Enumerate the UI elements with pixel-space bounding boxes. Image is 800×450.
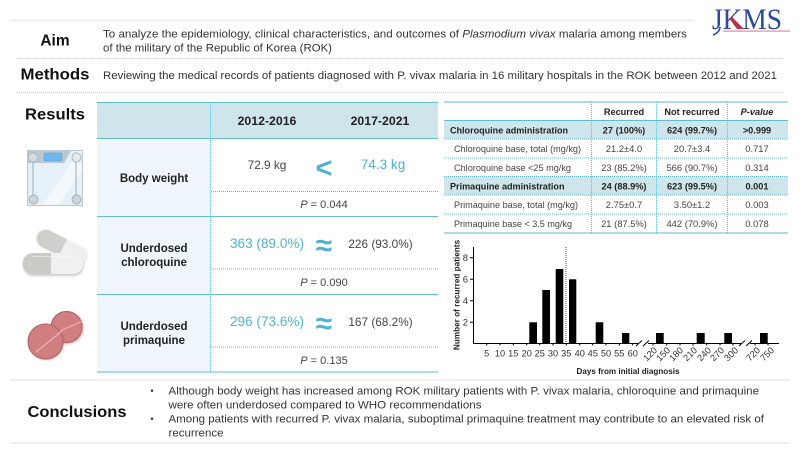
text: conclusions bullets: recurrence — [168, 428, 224, 440]
row: chloroquine base under 25: 0.314 — [745, 162, 769, 173]
row: primaquine base under 3.5: Primaquine base < 3.5 mg/kg — [454, 218, 572, 229]
x tick labels: 720 — [744, 345, 762, 363]
text: aim description: To analyze the epidemiology, clinical characteristics, and outcomes of Plasmodium vivax malaria among members — [103, 28, 680, 40]
x tick labels: 240 — [695, 345, 713, 363]
x tick labels: 5 — [484, 348, 489, 358]
row: chloroquine base total: 20.7±3.4 — [674, 143, 710, 154]
table header row: P-value — [741, 107, 773, 117]
row: underdosed chloroquine: Underdosed — [120, 243, 188, 255]
table header: 2017-2021 — [351, 114, 410, 128]
row: primaquine administration — [450, 182, 768, 192]
x tick labels: 40 — [575, 348, 585, 358]
icon: capsules — [22, 227, 90, 276]
x tick labels: 50 — [601, 348, 611, 358]
row: chloroquine base under 25: 23 (85.2%) — [601, 162, 647, 173]
icon: primaquine tablets — [28, 312, 84, 360]
y tick labels: 6 — [463, 274, 468, 286]
axes — [470, 247, 779, 346]
table header: 2012-2016 — [238, 114, 297, 128]
x tick labels: 55 — [614, 348, 624, 358]
text: conclusions bullets: Although body weight has increased among ROK military patients with P. vivax malaria, chloroquine and primaquine — [168, 386, 759, 398]
row: chloroquine administration: Chloroquine administration — [450, 126, 568, 136]
text: aim description: of the military of the Republic of Korea (ROK) — [103, 42, 332, 54]
row: underdosed primaquine — [120, 308, 413, 367]
table header row — [604, 107, 773, 117]
row: underdosed primaquine: ≈ — [316, 308, 332, 340]
x tick labels: 15 — [508, 348, 518, 358]
x tick labels: 210 — [681, 345, 699, 363]
row: underdosed primaquine: Underdosed — [120, 321, 188, 333]
row: body weight: Body weight — [120, 173, 188, 185]
x tick labels: 270 — [708, 345, 726, 363]
row: primaquine base under 3.5: 0.078 — [745, 218, 769, 229]
icon: bathroom scale — [28, 150, 82, 206]
panel: dosing comparison table — [97, 102, 438, 372]
y tick labels: 8 — [463, 253, 468, 264]
row: body weight: < — [316, 152, 332, 184]
row: primaquine base total: 3.50±1.2 — [674, 199, 710, 210]
heading: Methods: Methods — [20, 66, 90, 83]
panel: recurrence table — [444, 102, 788, 233]
row: primaquine administration: Primaquine administration — [450, 182, 565, 192]
x tick labels: 30 — [548, 348, 558, 358]
row: body weight: P = 0.044 — [300, 199, 348, 211]
row: underdosed chloroquine: 226 (93.0%) — [348, 237, 413, 251]
logo: JKMS: JKMS — [712, 3, 782, 36]
row: chloroquine base under 25: Chloroquine base <25 mg/kg — [454, 162, 571, 173]
y tick labels: 2 — [463, 318, 468, 328]
row: chloroquine base total: Chloroquine base, total (mg/kg) — [454, 143, 581, 154]
row: primaquine base total: Primaquine base, total (mg/kg) — [454, 199, 578, 210]
table header — [97, 102, 438, 138]
x tick labels: 10 — [495, 348, 505, 358]
bars — [529, 269, 768, 343]
row: primaquine base under 3.5: 442 (70.9%) — [666, 218, 718, 229]
row: chloroquine base total: 21.2±4.0 — [606, 143, 642, 154]
y tick labels: 4 — [463, 296, 468, 307]
row: chloroquine administration — [450, 126, 771, 136]
x tick labels: 35 — [561, 348, 571, 358]
x tick labels: 20 — [522, 348, 532, 358]
row: body weight — [120, 152, 405, 211]
row: primaquine administration: 0.001 — [746, 182, 768, 192]
table header row: Not recurred — [664, 107, 720, 117]
x tick labels: 45 — [588, 348, 598, 358]
reference line at day 35 — [565, 247, 567, 343]
row: underdosed primaquine: 167 (68.2%) — [348, 315, 413, 329]
row: underdosed primaquine: 296 (73.6%) — [230, 314, 304, 329]
row: primaquine base under 3.5 — [454, 218, 769, 229]
heading: Results: Results — [25, 106, 85, 123]
row: chloroquine base under 25: 566 (90.7%) — [666, 162, 718, 173]
row: underdosed chloroquine: ≈ — [316, 230, 332, 262]
text: conclusions bullets — [151, 386, 765, 440]
x axis title: Days from initial diagnosis — [576, 367, 680, 376]
row: primaquine administration: 24 (88.9%) — [602, 182, 646, 192]
row: chloroquine base under 25 — [454, 162, 769, 173]
heading: Conclusions: Conclusions — [28, 404, 126, 421]
row: primaquine administration: 623 (99.5%) — [667, 182, 717, 192]
row: chloroquine administration: 624 (99.7%) — [667, 126, 717, 136]
row: chloroquine base total — [454, 143, 769, 154]
x tick labels: 180 — [667, 345, 685, 363]
y tick labels — [463, 253, 468, 328]
row: underdosed chloroquine: 363 (89.0%) — [230, 236, 304, 251]
heading: Aim: Aim — [40, 32, 70, 50]
row: underdosed primaquine: P = 0.135 — [300, 355, 348, 367]
x tick labels: 25 — [535, 348, 545, 358]
x tick labels: 300 — [722, 345, 740, 363]
table header row: Recurred — [604, 107, 644, 117]
row: primaquine base under 3.5: 21 (87.5%) — [601, 218, 647, 229]
bar chart: days to recurrence — [452, 240, 779, 376]
x tick labels: 750 — [758, 345, 776, 363]
x tick labels: 120 — [641, 345, 659, 363]
row: primaquine base total: 0.003 — [745, 199, 769, 210]
row: primaquine base total: 2.75±0.7 — [606, 199, 642, 210]
row: chloroquine base total: 0.717 — [745, 143, 769, 154]
row: underdosed chloroquine — [120, 230, 413, 289]
row: underdosed chloroquine: P = 0.090 — [300, 277, 348, 289]
row: body weight: 74.3 kg — [361, 157, 405, 172]
x tick labels: 60 — [628, 348, 638, 358]
row: chloroquine administration: >0.999 — [743, 126, 771, 136]
row: underdosed chloroquine: chloroquine — [121, 257, 187, 269]
y axis title: Number of recurred patients — [452, 240, 462, 350]
row: chloroquine administration: 27 (100%) — [603, 126, 645, 136]
x tick labels — [484, 345, 776, 363]
x tick labels: 150 — [654, 345, 672, 363]
row: primaquine base total — [454, 199, 769, 210]
row: underdosed primaquine: primaquine — [123, 335, 185, 347]
text: conclusions bullets: Among patients with recurred P. vivax malaria, suboptimal primaquine treatment may contribute to an elevated risk of — [168, 414, 765, 426]
row: body weight: 72.9 kg — [248, 158, 286, 172]
text: methods description: Reviewing the medical records of patients diagnosed with P. vivax malaria in 16 military hospitals in the ROK between 2012 and 2021 — [103, 70, 777, 82]
text: conclusions bullets: were often underdosed compared to WHO recommendations — [167, 400, 482, 412]
